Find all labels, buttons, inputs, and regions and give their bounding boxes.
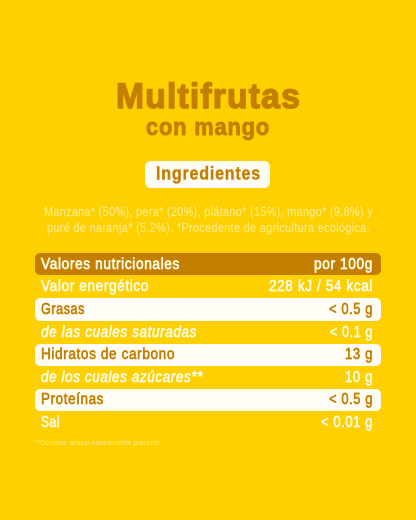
table header row [35, 253, 381, 275]
subtitle: con mango [146, 114, 270, 141]
row: energy: Valor energético [41, 278, 149, 295]
table header row: Valores nutricionales [41, 256, 180, 273]
row: fats: < 0.5 g [329, 301, 373, 318]
title: Multifrutas [116, 77, 301, 116]
row: fats [35, 298, 381, 321]
row: protein [35, 389, 381, 411]
ingredients text: puré de naranja* (5.2%). *Procedente de agricultura ecológica. [47, 221, 370, 235]
ingredients text [44, 205, 373, 235]
row: sugars: de los cuales azúcares** [41, 369, 203, 386]
row: sugars: 10 g [345, 369, 373, 386]
row: saturates: de las cuales saturadas [41, 324, 197, 341]
row: carbohydrates: 13 g [345, 346, 373, 363]
row: salt [41, 414, 373, 431]
row: carbohydrates: Hidratos de carbono [41, 346, 175, 363]
row: sugars [41, 369, 373, 386]
table header row: por 100g [314, 256, 373, 273]
row: saturates [41, 324, 373, 341]
nutrition table [35, 253, 381, 431]
row: fats: Grasas [41, 301, 85, 318]
footnote: **Contiene azúcar naturalmente presente [35, 440, 160, 447]
row: salt: Sal [41, 414, 60, 431]
ingredients text: Manzana* (50%), pera* (20%), plátano* (15%), mango* (9.8%) y [44, 205, 373, 219]
row: carbohydrates [35, 344, 381, 366]
row: protein: Proteínas [41, 391, 104, 408]
row: energy: 228 kJ / 54 kcal [269, 278, 373, 295]
row: saturates: < 0.1 g [330, 324, 373, 341]
ingredients badge: Ingredientes [156, 162, 261, 184]
row: protein: < 0.5 g [329, 391, 373, 408]
row: salt: < 0.01 g [321, 414, 373, 431]
row: energy [41, 278, 373, 295]
ingredients badge [145, 161, 270, 188]
